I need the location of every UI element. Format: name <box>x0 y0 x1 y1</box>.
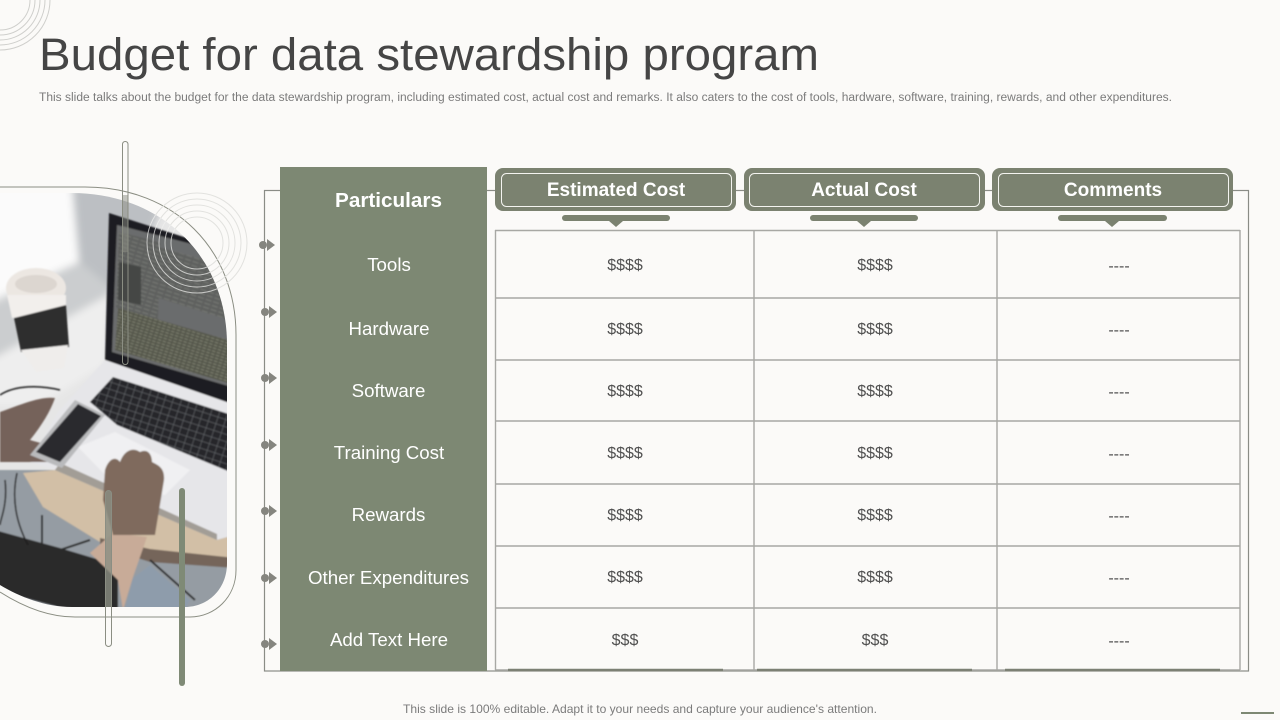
row: software: ---- <box>1108 384 1130 401</box>
column header: actual cost <box>744 168 985 211</box>
column header: actual cost: Actual Cost <box>811 180 917 201</box>
row markers <box>259 239 277 650</box>
marker: tools <box>259 239 275 251</box>
pointer: estimated cost <box>562 215 670 227</box>
row: rewards: ---- <box>1108 508 1130 525</box>
row: tools: ---- <box>1108 258 1130 275</box>
title: Budget for data stewardship program <box>39 29 819 80</box>
row: other expenditures <box>607 569 1130 587</box>
row: add text here: $$$ <box>862 632 888 649</box>
column header: estimated cost: Estimated Cost <box>547 180 686 201</box>
label: other expenditures: Other Expenditures <box>308 567 469 588</box>
marker: add text here <box>261 638 277 650</box>
row: rewards <box>607 507 1130 525</box>
footer note: This slide is 100% editable. Adapt it to your needs and capture your audience's attention. <box>403 702 877 716</box>
column header: comments <box>992 168 1233 211</box>
subtitle: This slide talks about the budget for the data stewardship program, including estimated cost, actual cost and remarks. It also caters to the cost of tools, hardware, software, training, rewards, and other expenditures. <box>39 92 1172 104</box>
label: training cost: Training Cost <box>334 442 445 463</box>
row: training cost: $$$$ <box>607 445 643 462</box>
row: add text here: ---- <box>1108 633 1130 650</box>
label: add text here: Add Text Here <box>330 629 448 650</box>
vertical bar: solid <box>179 488 185 686</box>
label: hardware: Hardware <box>348 318 430 339</box>
row: software: $$$$ <box>607 383 643 400</box>
table frame <box>264 190 1248 671</box>
row: add text here: $$$ <box>612 632 638 649</box>
heading: particulars: Particulars <box>335 189 442 212</box>
table grid <box>495 230 1240 670</box>
marker: other expenditures <box>261 572 277 584</box>
photo outline <box>0 187 236 617</box>
row: tools: $$$$ <box>857 257 893 274</box>
footer accent bar <box>1241 712 1274 714</box>
row: software <box>607 383 1130 401</box>
row: software: $$$$ <box>857 383 893 400</box>
label: tools: Tools <box>367 254 411 275</box>
pointer: actual cost <box>810 215 918 227</box>
row: training cost: $$$$ <box>857 445 893 462</box>
photo <box>0 193 227 607</box>
row: hardware <box>607 321 1130 339</box>
row: rewards: $$$$ <box>607 507 643 524</box>
marker: training cost <box>261 439 277 451</box>
row: hardware: $$$$ <box>607 321 643 338</box>
row: other expenditures: ---- <box>1108 570 1130 587</box>
row: other expenditures: $$$$ <box>857 569 893 586</box>
label: rewards: Rewards <box>352 504 425 525</box>
row: training cost: ---- <box>1108 446 1130 463</box>
label: software: Software <box>352 380 425 401</box>
decorative circles behind photo <box>147 193 247 293</box>
row: other expenditures: $$$$ <box>607 569 643 586</box>
pointer: comments <box>1058 215 1167 227</box>
row: add text here <box>612 632 1130 650</box>
vertical bar: outlined bottom <box>106 490 112 646</box>
decorative circles: top left <box>0 0 50 50</box>
row: tools: $$$$ <box>607 257 643 274</box>
row: rewards: $$$$ <box>857 507 893 524</box>
marker: hardware <box>261 306 277 318</box>
row: hardware: $$$$ <box>857 321 893 338</box>
column header: estimated cost <box>495 168 736 211</box>
row: tools <box>607 257 1130 275</box>
row: training cost <box>607 445 1130 463</box>
image panel: laptop photo <box>0 142 247 686</box>
vertical bar: outlined top <box>122 142 128 364</box>
marker: rewards <box>261 505 277 517</box>
column header: comments: Comments <box>1064 180 1162 201</box>
row: hardware: ---- <box>1108 322 1130 339</box>
marker: software <box>261 372 277 384</box>
panel: particulars <box>280 167 487 671</box>
